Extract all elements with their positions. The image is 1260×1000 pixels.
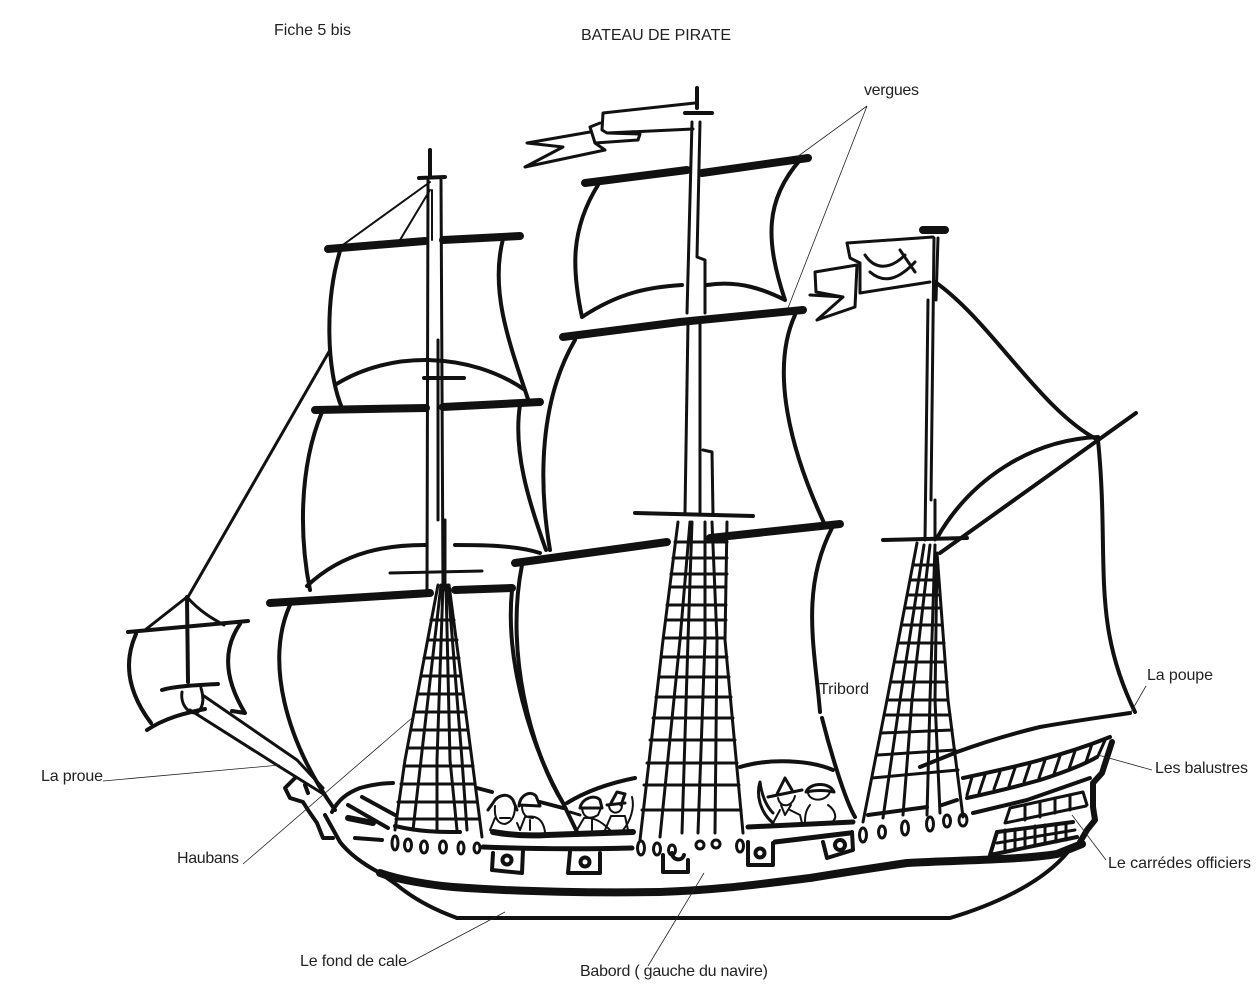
main mast sails [515,158,855,817]
balustrade [963,737,1110,813]
callout: le fond de cale [300,912,505,970]
mizzen shrouds [863,543,963,822]
callout: la proue [41,765,280,785]
callout: les balustres: Les balustres [1155,760,1248,777]
gun ports [492,832,853,873]
callout: vergues [788,82,919,308]
portholes [392,814,967,855]
bowsprit [190,696,325,795]
pirates left [488,792,633,832]
callout: le fond de cale: Le fond de cale [300,953,407,970]
mizzen mast [923,230,945,540]
hull [325,761,1082,918]
main mast pennant [525,103,695,167]
foremast sails [270,236,577,832]
callout: tribord: Tribord [819,681,869,698]
callout: la poupe [1131,667,1213,712]
main mast shrouds [640,522,743,840]
callout: babord: Babord ( gauche du navire) [580,963,768,980]
callout: la proue: La proue [41,768,103,785]
figurehead [285,778,333,838]
callout: officers' quarters: Le carrédes officiers [1108,855,1251,872]
callout: les balustres [1098,755,1248,777]
callout: babord [580,873,768,980]
callout: la poupe: La poupe [1147,667,1213,684]
main mast [685,88,713,515]
bowsprit sail [128,350,330,730]
callout: haubans [177,718,412,867]
mizzen flag [810,237,933,320]
foremast shrouds [395,585,482,837]
callout: vergues: vergues [864,82,919,99]
title: pirate ship: BATEAU DE PIRATE [581,27,731,44]
pirates right [759,778,835,823]
stern [1080,742,1112,842]
foremast [340,150,464,590]
title: sheet number: Fiche 5 bis [274,22,351,39]
callout: haubans: Haubans [177,850,239,867]
officers' quarters [990,792,1087,855]
mizzen sails [883,282,1136,767]
callout: officers' quarters [1072,815,1251,872]
